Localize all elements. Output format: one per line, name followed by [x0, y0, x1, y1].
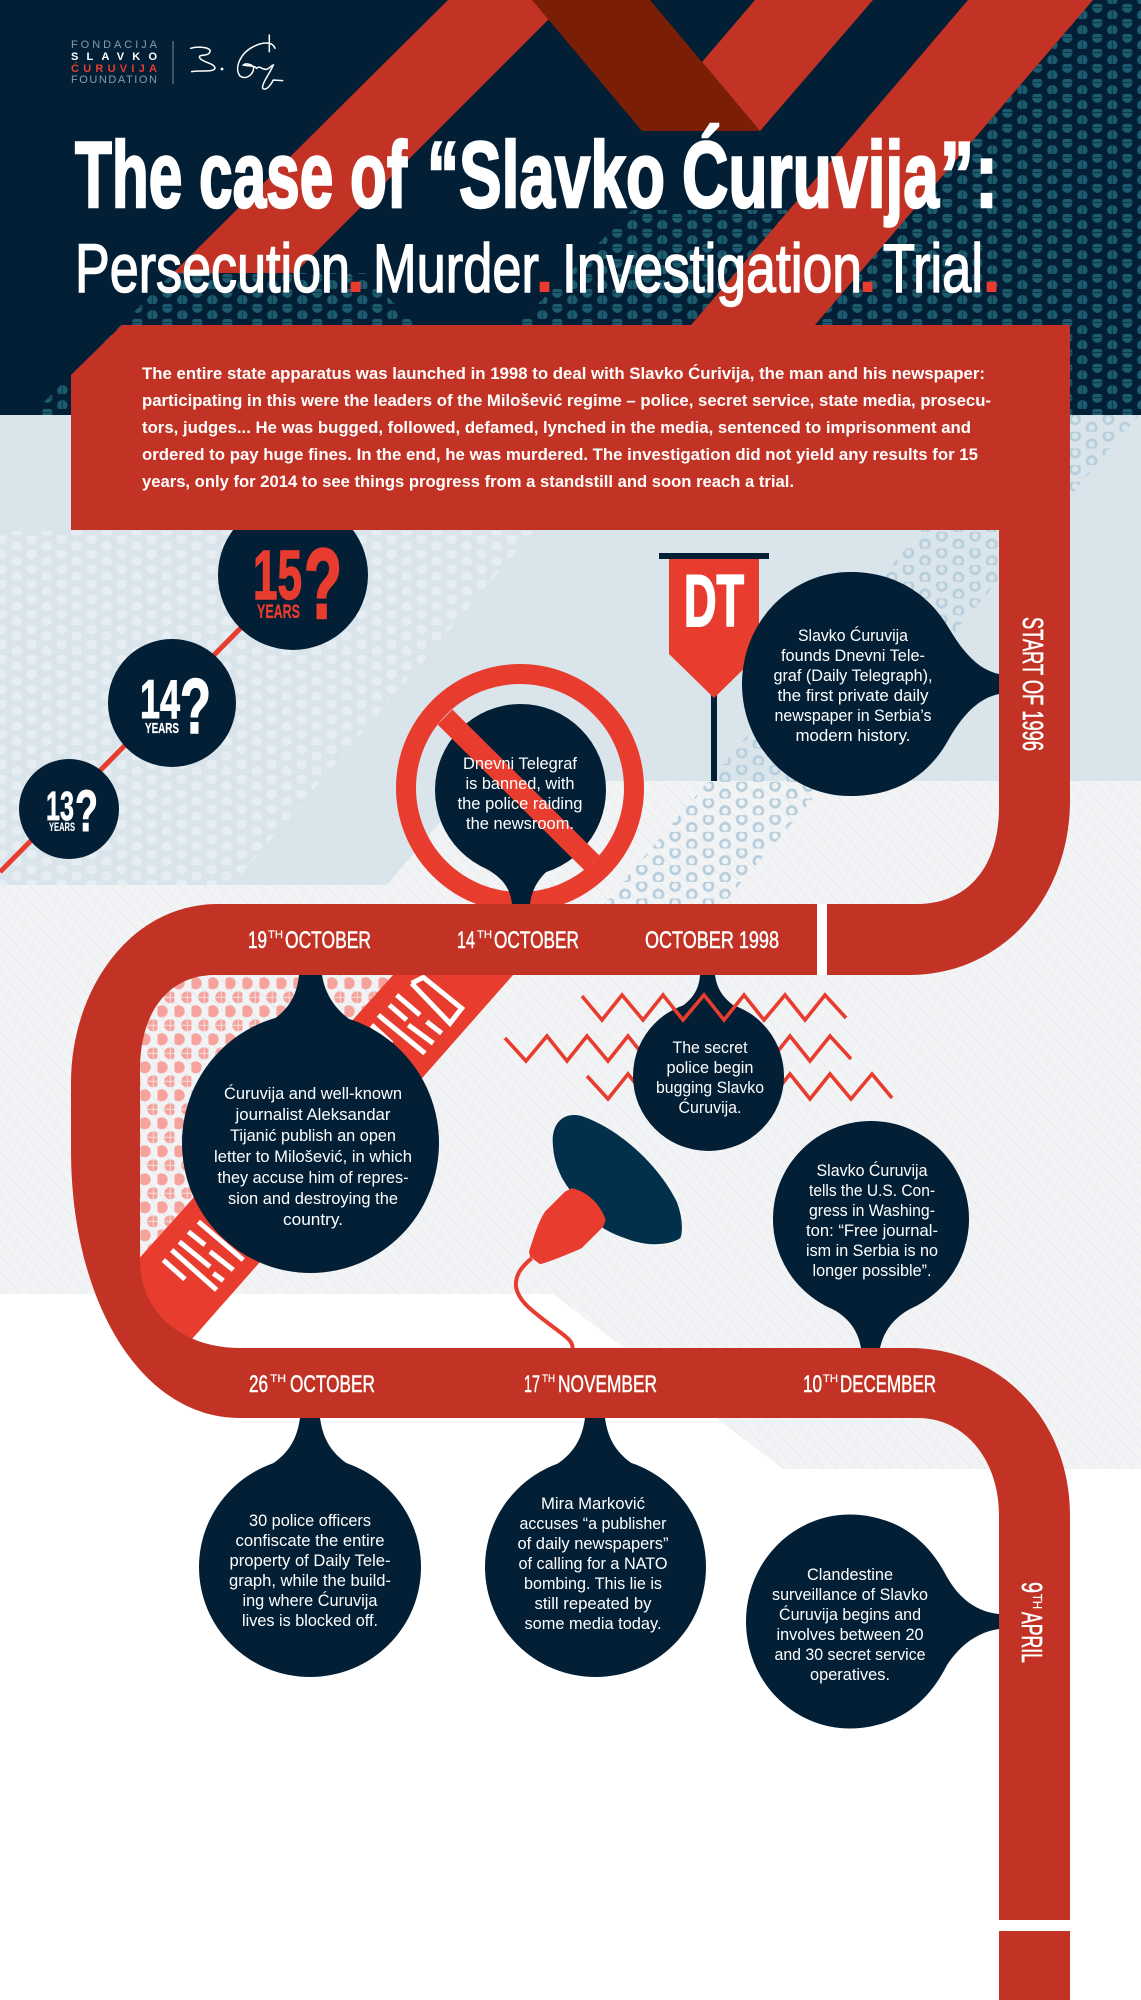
- date labels, second row: [249, 1371, 936, 1398]
- date labels, first row: TH: [268, 929, 283, 941]
- logo: foundation wordmark and signature: SLAVKO: [71, 51, 157, 63]
- bubble: police confiscate property: property of Daily Tele-: [230, 1552, 390, 1570]
- date labels, second row: TH: [542, 1373, 555, 1385]
- badge: 15 years: ?: [304, 528, 342, 639]
- date labels, second row: 17: [524, 1371, 540, 1398]
- bubble: clandestine surveillance: operatives.: [810, 1666, 890, 1684]
- header navy background: [0, 0, 1141, 415]
- intro paragraph: years, only for 2014 to see things progress from a standstill and soon reach a trial.: [142, 473, 794, 491]
- date labels, second row: 26: [249, 1371, 268, 1398]
- intro paragraph: ordered to pay huge fines. In the end, he was murdered. The investigation did not yield any results for 15: [142, 446, 978, 464]
- red diagonal stripes: [173, 0, 1093, 325]
- bubble: police confiscate property: confiscate the entire: [236, 1532, 384, 1550]
- bubble: police confiscate property: 30 police officers: [249, 1512, 371, 1530]
- badge: 14 years: 14: [140, 668, 180, 730]
- intro paragraph: The entire state apparatus was launched in 1998 to deal with Slavko Ćurivija, the man and his newspaper:: [142, 364, 985, 383]
- bubble: Dnevni Telegraf banned: is banned, with: [466, 775, 574, 793]
- badge: 15 years: 15: [253, 536, 302, 614]
- title: ”: [940, 122, 974, 227]
- bubble: secret police bugging: [633, 975, 784, 1151]
- bubble: Mira Marković accusation: bombing. This lie is: [524, 1575, 662, 1593]
- bubble: police confiscate property: graph, while the build-: [229, 1572, 391, 1590]
- teal dot pattern areas: [31, 0, 1141, 415]
- bubble: U.S. Congress statement: [773, 1121, 969, 1348]
- badge: 14 years: ?: [180, 662, 211, 750]
- date labels, first row: OCTOBER: [285, 927, 371, 954]
- bubble: open letter to Milošević: journalist Aleksandar: [234, 1106, 391, 1124]
- vertical label: 9th April: APRIL: [1015, 1612, 1047, 1663]
- bubble: clandestine surveillance: Ćuruvija begins and: [779, 1605, 921, 1624]
- logo: foundation wordmark and signature: FOUNDATION: [71, 74, 157, 86]
- bubble: open letter to Milošević: Ćuruvija and well-known: [224, 1084, 402, 1103]
- vertical label: 9th April: [1015, 1582, 1047, 1663]
- bubble: Dnevni Telegraf banned: the police raiding: [458, 795, 582, 813]
- badge: 15 years: YEARS: [257, 602, 300, 623]
- bubble: founds Dnevni Telegraf: graf (Daily Telegraph),: [774, 667, 932, 685]
- date labels, second row: OCTOBER: [290, 1371, 375, 1398]
- bubble: founds Dnevni Telegraf: Slavko Ćuruvija: [798, 626, 909, 645]
- bubble: police confiscate property: [199, 1418, 421, 1677]
- zigzag line over bubble neck: [582, 995, 846, 1020]
- subtitle: .: [535, 230, 554, 307]
- subtitle: .: [982, 230, 1001, 307]
- title: “Slavko: [427, 122, 665, 227]
- title: :: [975, 122, 998, 227]
- bubble: Dnevni Telegraf banned: Dnevni Telegraf: [463, 755, 577, 773]
- logo: foundation wordmark and signature: ĆURUVIJA: [71, 62, 157, 75]
- date labels, second row: NOVEMBER: [558, 1371, 657, 1398]
- bubble: police confiscate property: lives is blocked off.: [242, 1612, 378, 1630]
- bubble: founds Dnevni Telegraf: founds Dnevni Tele-: [781, 647, 925, 665]
- subtitle: Investigation: [562, 230, 862, 307]
- bubble: clandestine surveillance: Clandestine: [807, 1566, 893, 1584]
- badge: 13 years: 13: [46, 783, 74, 829]
- bubble: open letter to Milošević: they accuse him of repres-: [218, 1169, 408, 1187]
- bubble: Mira Marković accusation: of daily newspapers”: [518, 1535, 668, 1553]
- intro paragraph: participating in this were the leaders of the Milošević regime – police, secret service, state media, prosecu-: [142, 392, 991, 410]
- subtitle: Persecution: [75, 230, 350, 307]
- date labels, first row: TH: [477, 929, 492, 941]
- date labels, second row: 10: [803, 1371, 822, 1398]
- bubble: open letter to Milošević: letter to Milošević, in which: [214, 1148, 412, 1166]
- pink dot pattern: [140, 975, 393, 1257]
- bubble: founds Dnevni Telegraf: [742, 572, 999, 796]
- icon: lamp with cord: [516, 1115, 682, 1349]
- red timeline pipe and intro panel: [71, 325, 1070, 2000]
- logo: foundation wordmark and signature: FONDACIJA: [71, 39, 158, 51]
- ring dot pattern: [604, 415, 1139, 904]
- bubble: open letter to Milošević: [182, 975, 439, 1273]
- badge: 15 years: [218, 500, 368, 650]
- badge: 13 years: ?: [75, 779, 98, 844]
- bubble: founds Dnevni Telegraf: newspaper in Serbia’s: [774, 707, 932, 725]
- logo: foundation wordmark and signature: [71, 35, 283, 89]
- subtitle: Murder: [373, 230, 539, 307]
- subtitle: [75, 230, 1001, 307]
- badge: 13 years: YEARS: [49, 820, 75, 834]
- subtitle: .: [346, 230, 365, 307]
- bubble: clandestine surveillance: involves between 20: [776, 1626, 924, 1644]
- pale dot pattern: [0, 531, 534, 885]
- title: [75, 122, 998, 227]
- bubble: clandestine surveillance: and 30 secret service: [774, 1646, 926, 1664]
- date labels, second row: TH: [270, 1373, 286, 1385]
- subtitle: Trial: [883, 230, 983, 307]
- badge: 14 years: YEARS: [145, 720, 179, 737]
- date labels, second row: DECEMBER: [840, 1371, 936, 1398]
- pale blue background: [0, 415, 1141, 885]
- bubble: secret police bugging: The secret: [672, 1039, 748, 1057]
- icon: DT flag on pole: DT: [684, 561, 744, 642]
- vertical label: 9th April: 9: [1015, 1582, 1047, 1593]
- bubble: secret police bugging: Ćuruvija.: [678, 1098, 742, 1117]
- date labels, first row: 14: [457, 927, 475, 954]
- badge: 13 years: [19, 759, 119, 859]
- bubble: U.S. Congress statement: gress in Washing-: [809, 1202, 935, 1220]
- pipe tick marks: [817, 904, 1070, 1931]
- years line: [0, 575, 293, 872]
- bubble: Mira Marković accusation: accuses “a publisher: [520, 1515, 667, 1533]
- bubble: secret police bugging: police begin: [666, 1059, 754, 1077]
- bubble: U.S. Congress statement: longer possible”.: [812, 1262, 932, 1280]
- bubble: founds Dnevni Telegraf: modern history.: [796, 727, 910, 745]
- bubble: U.S. Congress statement: Slavko Ćuruvija: [816, 1161, 928, 1180]
- bubble: Mira Marković accusation: some media today.: [524, 1615, 662, 1633]
- title: The case of: [75, 122, 407, 227]
- intro paragraph: tors, judges... He was bugged, followed, defamed, lynched in the media, sentenced to imprisonment and: [142, 419, 971, 437]
- title: Ćuruvija: [682, 122, 939, 227]
- bubble: founds Dnevni Telegraf: the first private daily: [778, 687, 929, 705]
- bubble: Mira Marković accusation: Mira Marković: [541, 1495, 645, 1513]
- grey hatched background: [0, 781, 1141, 1469]
- bubble: clandestine surveillance: [746, 1514, 999, 1728]
- bubble: U.S. Congress statement: ton: “Free journal-: [806, 1222, 938, 1240]
- bubble: Mira Marković accusation: still repeated by: [534, 1595, 652, 1613]
- red ribbon with white code marks: [100, 975, 513, 1364]
- bubble: Mira Marković accusation: [485, 1418, 706, 1677]
- date labels, first row: [248, 927, 779, 954]
- vertical label: 9th April: TH: [1030, 1594, 1045, 1609]
- date labels, second row: TH: [823, 1373, 838, 1385]
- bubble: Mira Marković accusation: of calling for a NATO: [518, 1555, 668, 1573]
- bubble: Dnevni Telegraf banned: [435, 704, 606, 904]
- bubble: Dnevni Telegraf banned: the newsroom.: [466, 815, 574, 833]
- bubble: open letter to Milošević: country.: [283, 1211, 343, 1229]
- bubble: police confiscate property: ing where Ćuruvija: [242, 1591, 378, 1610]
- icon: DT flag on pole: [659, 553, 769, 781]
- zigzag lines behind bubble: [505, 1036, 892, 1099]
- date labels, first row: OCTOBER 1998: [645, 927, 779, 954]
- intro paragraph: [142, 364, 991, 491]
- bubble: U.S. Congress statement: ism in Serbia is no: [806, 1242, 938, 1260]
- bubble: clandestine surveillance: surveillance of Slavko: [772, 1586, 928, 1604]
- badge: 14 years: [108, 639, 236, 767]
- bubble: open letter to Milošević: sion and destroying the: [228, 1190, 398, 1208]
- subtitle: .: [858, 230, 877, 307]
- bubble: U.S. Congress statement: tells the U.S. Con-: [809, 1182, 935, 1200]
- date labels, first row: 19: [248, 927, 267, 954]
- vertical label: start of 1996: START OF 1996: [1016, 617, 1048, 751]
- icon: prohibition ring: [406, 674, 634, 902]
- bubble: secret police bugging: bugging Slavko: [656, 1079, 764, 1097]
- bubble: open letter to Milošević: Tijanić publish an open: [230, 1127, 396, 1145]
- date labels, first row: OCTOBER: [494, 927, 579, 954]
